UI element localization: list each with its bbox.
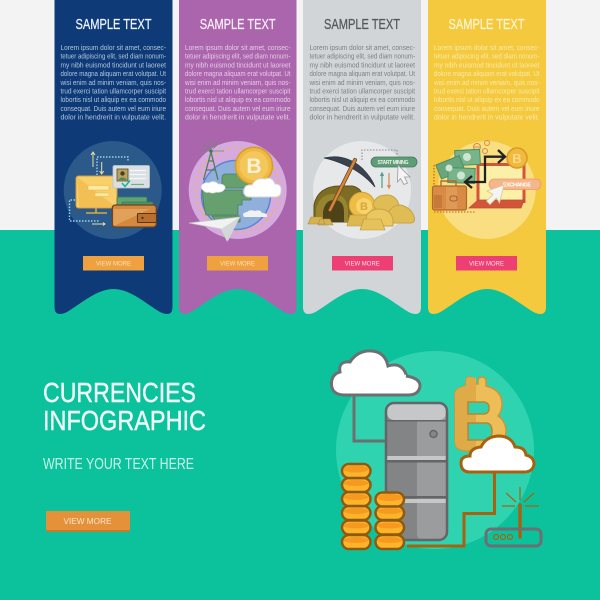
icon: coin stack tall: [342, 464, 370, 549]
text block: yellow panel: wisi enim ad minim veniam, quis nos-: [433, 80, 540, 87]
button: hero view more: [46, 511, 130, 532]
text block: yellow panel: my nibh euismod tincidunt ut laoreet: [434, 62, 540, 69]
panel: yellow: [428, 0, 546, 314]
background top: [0, 0, 600, 230]
heading: purple panel: SAMPLE TEXT: [200, 17, 276, 33]
icon: currency exchange: B: [512, 151, 522, 166]
heading: blue panel: SAMPLE TEXT: [76, 17, 152, 33]
text block: blue panel: Lorem ipsum dolor sit amet, consec-: [60, 45, 167, 52]
text block: blue panel: wisi enim ad minim veniam, quis nos-: [60, 80, 167, 87]
panel: purple: [179, 0, 296, 314]
text block: purple panel: trud exerci tation ullamcorper suscipit: [185, 88, 291, 96]
button: yellow panel: [456, 256, 517, 270]
text block: yellow panel: lobortis nisl ut aliquip ex ea commodo: [434, 97, 540, 104]
text block: purple panel: Lorem ipsum dolor sit amet, consec-: [185, 45, 291, 52]
text block: grey panel: dolor in hendrerit in vulputate velit.: [310, 115, 415, 122]
text block: yellow panel: dolore magna aliquam erat volutpat. Ut: [434, 71, 540, 78]
text block: purple panel: wisi enim ad minim veniam, quis nos-: [184, 80, 291, 87]
text block: yellow panel: trud exerci tation ullamcorper suscipit: [434, 88, 540, 96]
title: [43, 377, 206, 436]
icon: gold mining: [308, 141, 417, 239]
background teal: [0, 230, 600, 600]
text block: blue panel: tetuer adipiscing elit, sed diam nonum-: [60, 54, 167, 61]
icon: cloud grey: [331, 351, 420, 395]
text block: grey panel: my nibh euismod tincidunt ut laoreet: [310, 62, 415, 69]
text block: yellow panel: Lorem ipsum dolor sit amet, consec-: [434, 45, 540, 52]
text block: purple panel: dolore magna aliquam erat volutpat. Ut: [185, 71, 291, 78]
text block: blue panel: [60, 45, 167, 122]
title: CURRENCIES: [43, 377, 196, 408]
icon: gold mining: B: [360, 201, 368, 213]
button: blue panel: VIEW MORE: [96, 262, 131, 268]
text block: grey panel: tetuer adipiscing elit, sed diam nonum-: [310, 54, 416, 61]
button: hero view more: VIEW MORE: [64, 516, 112, 526]
text block: grey panel: trud exerci tation ullamcorper suscipit: [310, 88, 415, 96]
text block: blue panel: dolore magna aliquam erat volutpat. Ut: [60, 71, 166, 78]
panel: blue: [54, 0, 172, 314]
text block: grey panel: [309, 45, 416, 122]
button: grey panel: [332, 256, 393, 270]
text block: purple panel: dolor in hendrerit in vulputate velit.: [185, 115, 291, 122]
text block: purple panel: consequat. Duis autem vel eum iriure: [185, 106, 291, 113]
text block: blue panel: my nibh euismod tincidunt ut laoreet: [60, 62, 166, 69]
icon: verified wallet: [64, 141, 162, 239]
icon: bitcoin symbol: [455, 377, 506, 451]
button: purple panel: VIEW MORE: [220, 262, 255, 268]
button: grey panel: VIEW MORE: [345, 262, 380, 268]
button: purple panel: [207, 256, 268, 270]
icon: server tower: [386, 403, 447, 540]
text block: grey panel: consequat. Duis autem vel eum iriure: [310, 106, 415, 113]
icon: globe and bitcoin: [189, 138, 287, 241]
icon: globe and bitcoin: B: [246, 155, 262, 178]
illustration: cloud server mining: [331, 351, 541, 549]
heading: grey panel: SAMPLE TEXT: [324, 17, 400, 33]
icon: gold mining: START MINING: [378, 160, 409, 166]
text block: purple panel: my nibh euismod tincidunt ut laoreet: [185, 62, 291, 69]
text block: grey panel: Lorem ipsum dolor sit amet, consec-: [310, 45, 416, 52]
text block: blue panel: dolor in hendrerit in vulputate velit.: [60, 115, 166, 122]
panel: grey: [303, 0, 421, 314]
icon: cloud orange: [461, 436, 534, 472]
text block: blue panel: consequat. Duis autem vel eum iriure: [60, 106, 166, 113]
text block: grey panel: dolore magna aliquam erat volutpat. Ut: [310, 71, 415, 78]
text block: purple panel: [184, 45, 291, 122]
button: yellow panel: VIEW MORE: [469, 262, 504, 268]
text block: grey panel: lobortis nisl ut aliquip ex ea commodo: [310, 97, 415, 104]
title: INFOGRAPHIC: [43, 405, 206, 436]
text block: yellow panel: [433, 45, 540, 122]
icon: currency exchange: [432, 140, 541, 239]
heading: yellow panel: SAMPLE TEXT: [448, 17, 525, 33]
icon: coin stack short: [376, 492, 404, 549]
subtitle: WRITE YOUR TEXT HERE: [43, 456, 194, 473]
text block: yellow panel: tetuer adipiscing elit, sed diam nonum-: [434, 54, 540, 61]
icon: currency exchange: EXCHANGE: [503, 183, 531, 189]
text block: blue panel: trud exerci tation ullamcorper suscipit: [60, 88, 166, 96]
button: blue panel: [83, 256, 144, 270]
text block: yellow panel: dolor in hendrerit in vulputate velit.: [434, 115, 540, 122]
text block: purple panel: tetuer adipiscing elit, sed diam nonum-: [185, 54, 291, 61]
text block: blue panel: lobortis nisl ut aliquip ex ea commodo: [60, 97, 166, 104]
text block: yellow panel: consequat. Duis autem vel eum iriure: [434, 106, 540, 113]
text block: grey panel: wisi enim ad minim veniam, quis nos-: [309, 80, 416, 87]
text block: purple panel: lobortis nisl ut aliquip ex ea commodo: [185, 97, 291, 104]
icon: wifi router: [486, 487, 541, 546]
wires: [354, 395, 386, 441]
